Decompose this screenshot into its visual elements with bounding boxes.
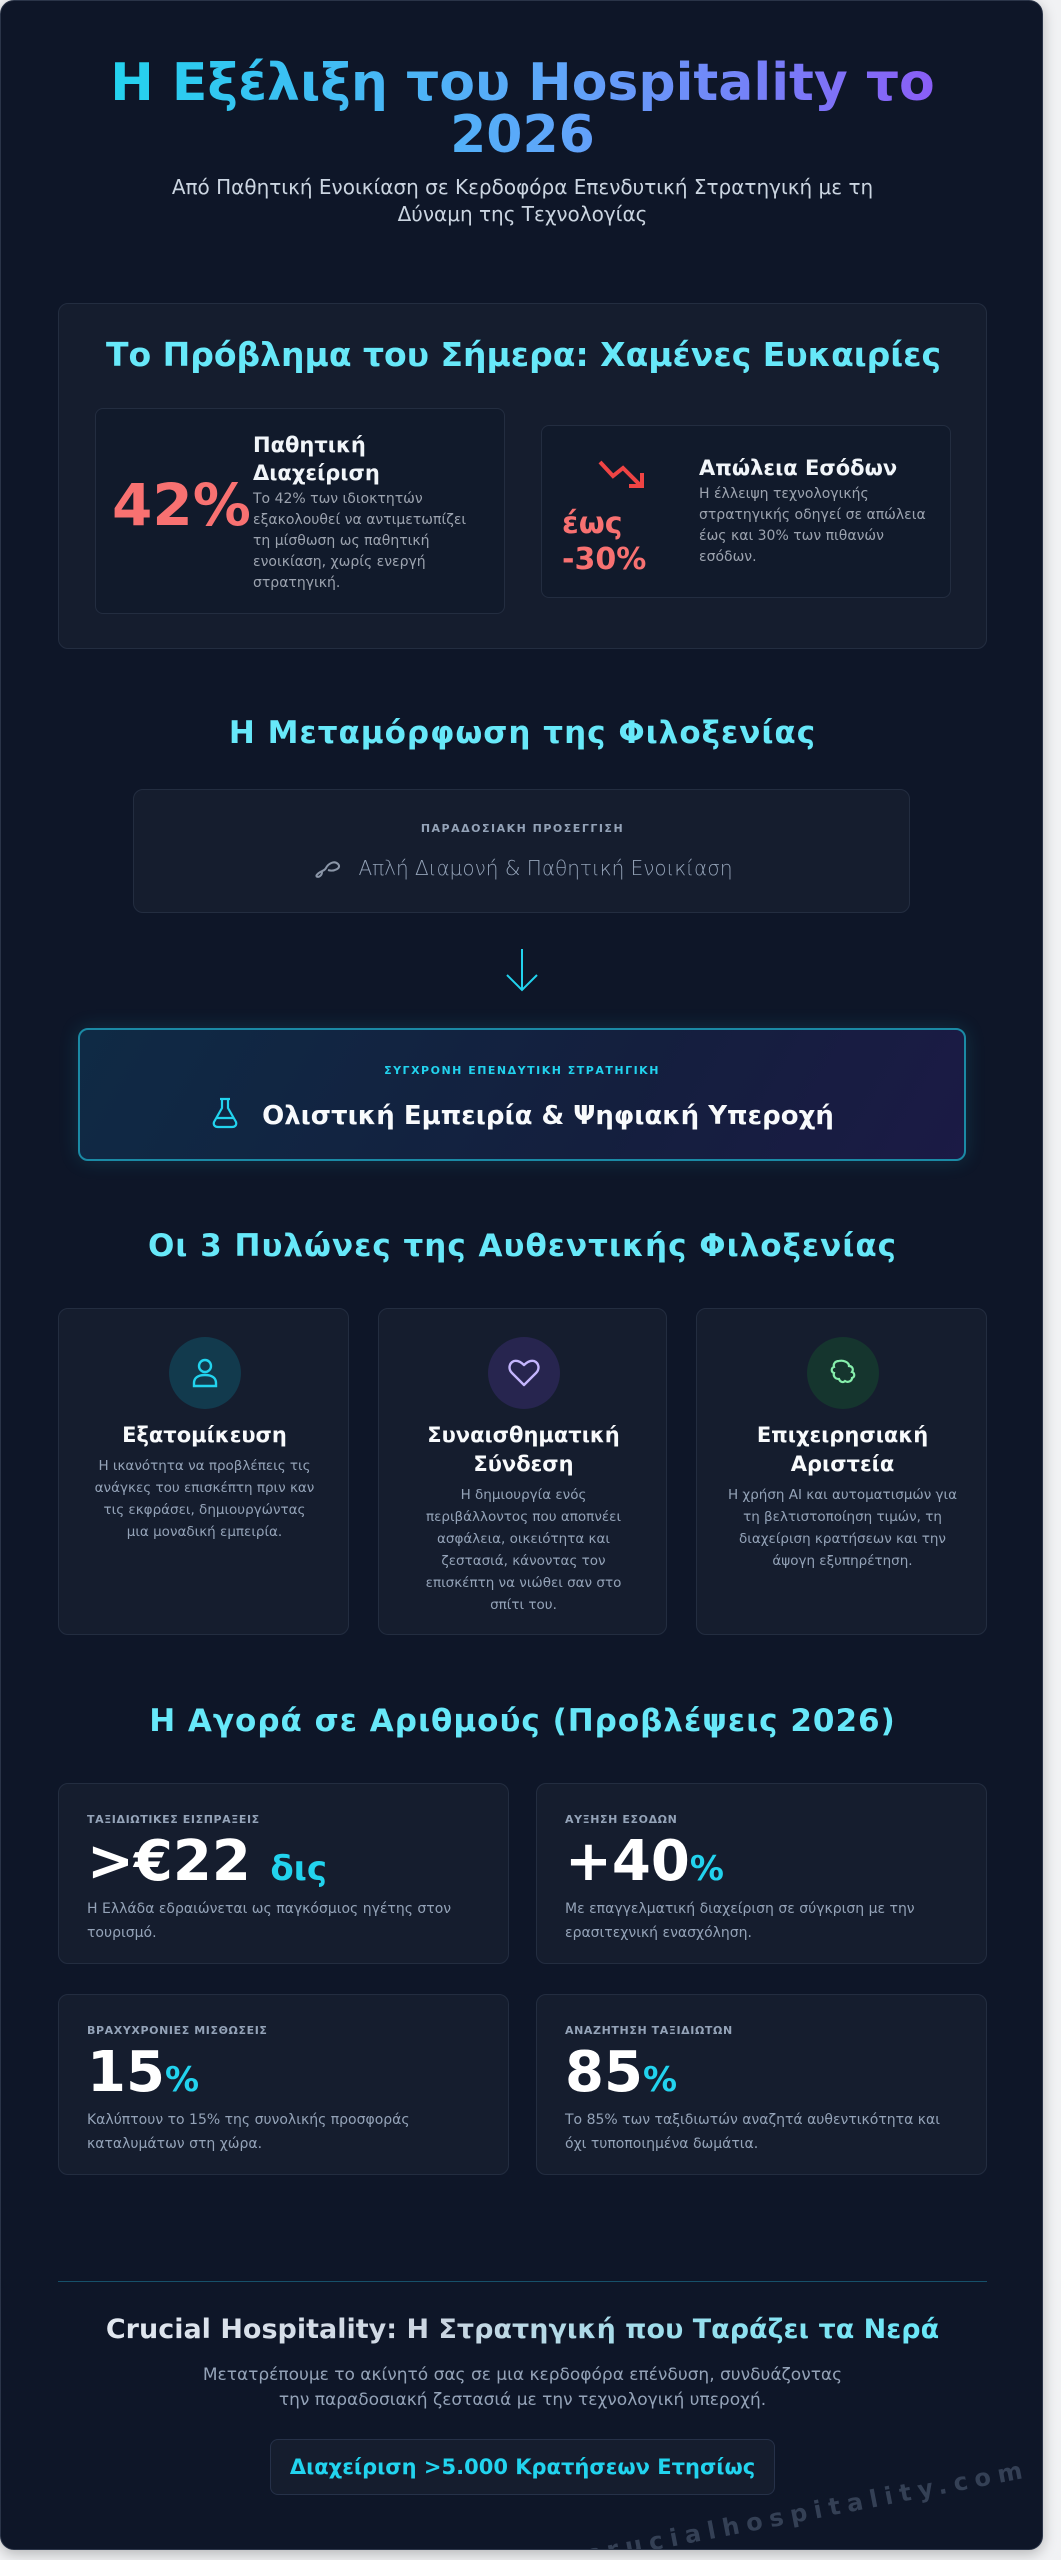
card: passive management (95, 408, 505, 614)
stat -30% (562, 506, 646, 577)
stat: short-term rentals: Καλύπτουν το 15% της συνολικής προσφοράς καταλυμάτων στη χώρα. (87, 2112, 410, 2152)
stat: traveler demand (536, 1994, 987, 2175)
button (270, 2439, 775, 2495)
stat: traveler demand: 85% (565, 2040, 677, 2105)
heading: market numbers: Η Αγορά σε Αριθμούς (Προβλέψεις 2026) (149, 1703, 896, 1739)
icon: trend down (598, 460, 644, 488)
desc: Η ικανότητα να προβλέπεις τις ανάγκες του επισκέπτη πριν καν τις εκφράσει, δημιουργώντας μια μοναδική εμπειρία. (95, 1458, 314, 1540)
box: traditional (133, 789, 910, 913)
stat: revenue growth: ΑΥΞΗΣΗ ΕΣΟΔΩΝ (565, 1813, 677, 1826)
label: ΣΥΓΧΡΟΝΗ ΕΠΕΝΔΥΤΙΚΗ ΣΤΡΑΤΗΓΙΚΗ (384, 1064, 660, 1077)
heading: pillars: Οι 3 Πυλώνες της Αυθεντικής Φιλοξενίας (148, 1228, 897, 1264)
stat -30%: έως (562, 506, 623, 541)
card: revenue loss (541, 425, 951, 598)
pillar: operational excellence (696, 1308, 987, 1635)
heading: problem: Το Πρόβλημα του Σήμερα: Χαμένες Ευκαιρίες (106, 335, 941, 374)
label: ΠΑΡΑΔΟΣΙΑΚΗ ΠΡΟΣΕΓΓΙΣΗ (421, 822, 624, 835)
stat: revenue growth: +40% (565, 1829, 724, 1894)
icon: heart (488, 1337, 560, 1409)
text with flask icon: Ολιστική Εμπειρία & Ψηφιακή Υπεροχή (262, 1101, 834, 1131)
text block (252, 433, 466, 591)
stat: travel receipts (58, 1783, 509, 1964)
closing heading: Crucial Hospitality: Η Στρατηγική που Ταράζει τα Νερά (106, 2314, 939, 2345)
closing paragraph: Μετατρέπουμε το ακίνητό σας σε μια κερδοφόρα επένδυση, συνδυάζοντας την παραδοσιακή ζεστασιά με την τεχνολογική υπεροχή. (203, 2365, 842, 2410)
text block: Η έλλειψη τεχνολογικής στρατηγικής οδηγεί σε απώλεια έως και 30% των πιθανών εσόδων. (699, 486, 926, 565)
icon: person (169, 1337, 241, 1409)
box: modern strategy (78, 1028, 966, 1161)
button: Διαχείριση >5.000 Κρατήσεων Ετησίως (290, 2455, 755, 2479)
desc: Η δημιουργία ενός περιβάλλοντος που αποπνέει ασφάλεια, οικειότητα και ζεστασιά, κάνοντας τον επισκέπτη να νιώθει σαν στο σπίτι του. (426, 1487, 621, 1613)
icon: brain (807, 1337, 879, 1409)
stat: short-term rentals (58, 1994, 509, 2175)
stat: travel receipts: >€22 δις (87, 1829, 327, 1894)
subtitle: Από Παθητική Ενοικίαση σε Κερδοφόρα Επενδυτική Στρατηγική με τη Δύναμη της Τεχνολογίας (172, 175, 873, 226)
stat: travel receipts: ΤΑΞΙΔΙΩΤΙΚΕΣ ΕΙΣΠΡΑΞΕΙΣ (87, 1813, 260, 1826)
pillar: personalization (58, 1308, 349, 1635)
text with icon: Απλή Διαμονή & Παθητική Ενοικίαση (358, 856, 733, 880)
heading: transformation: Η Μεταμόρφωση της Φιλοξενίας (229, 715, 816, 751)
text block: Παθητική Διαχείριση (253, 433, 380, 485)
pillar: emotional connection (378, 1308, 667, 1635)
stat: short-term rentals: 15% (87, 2040, 199, 2105)
title: Η Εξέλιξη του Hospitality το 2026 (110, 53, 935, 165)
stat 42%: 42% (112, 471, 251, 539)
title: Συναισθηματική Σύνδεση (427, 1423, 620, 1476)
text block: Απώλεια Εσόδων (699, 456, 897, 480)
text block: Το 42% των ιδιοκτητών εξακολουθεί να αντιμετωπίζει τη μίσθωση ως παθητική ενοικίαση, χωρίς ενεργή στρατηγική. (253, 491, 466, 591)
panel: problem (58, 303, 987, 649)
stat: short-term rentals: ΒΡΑΧΥΧΡΟΝΙΕΣ ΜΙΣΘΩΣΕΙΣ (87, 2024, 268, 2037)
stat: revenue growth (536, 1783, 987, 1964)
arrow down (506, 949, 538, 992)
title: Εξατομίκευση (122, 1423, 287, 1447)
stat -30%: -30% (562, 542, 646, 577)
stat: revenue growth: Με επαγγελματική διαχείριση σε σύγκριση με την ερασιτεχνική ενασχόληση. (565, 1901, 915, 1941)
stat: traveler demand: ΑΝΑΖΗΤΗΣΗ ΤΑΞΙΔΙΩΤΩΝ (565, 2024, 733, 2037)
title: Επιχειρησιακή Αριστεία (757, 1423, 928, 1476)
desc: Η χρήση AI και αυτοματισμών για τη βελτιστοποίηση τιμών, τη διαχείριση κρατήσεων και την άψογη εξυπηρέτηση. (728, 1487, 957, 1569)
stat: traveler demand: Το 85% των ταξιδιωτών αναζητά αυθεντικότητα και όχι τυποποιημένα δωμάτια. (565, 2112, 940, 2152)
stat: travel receipts: Η Ελλάδα εδραιώνεται ως παγκόσμιος ηγέτης στον τουρισμό. (87, 1901, 451, 1941)
